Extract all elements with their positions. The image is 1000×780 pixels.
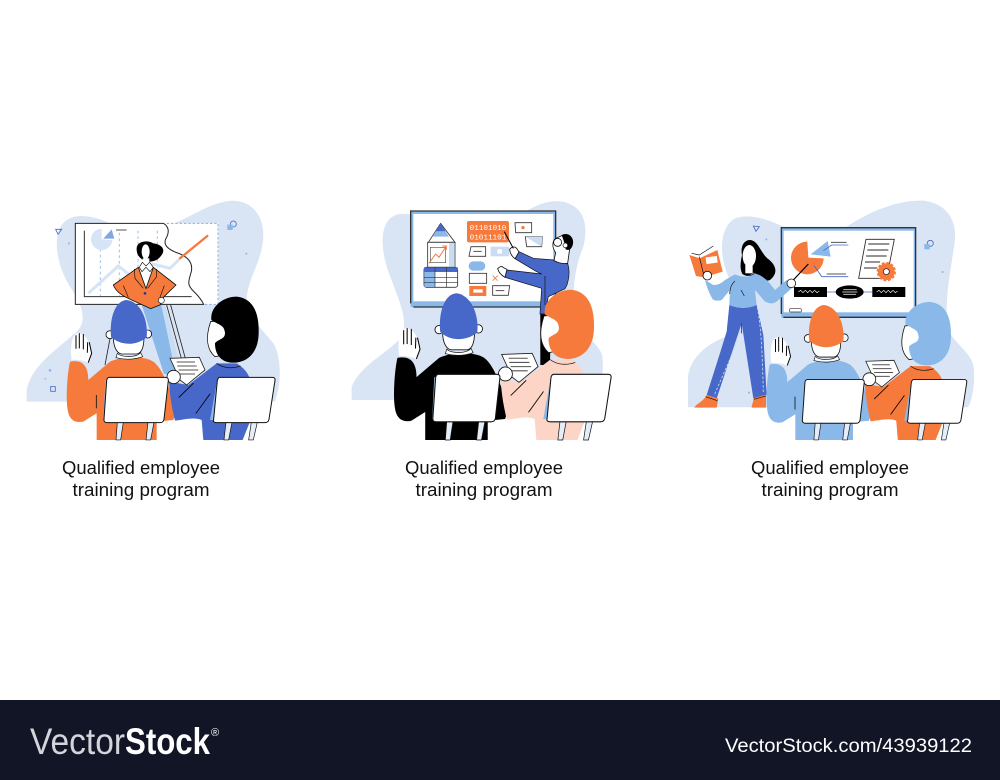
person left torso (67, 357, 177, 440)
whiteboard (781, 228, 916, 318)
footer band (0, 700, 1000, 780)
VectorStock logo: Stock (125, 721, 210, 762)
image id: VectorStock.com/43939122 (725, 736, 972, 757)
presenter with book and pointer (689, 240, 808, 408)
flowchart blocks (469, 223, 542, 296)
audience: two seated people (67, 297, 275, 440)
binary code tile: 01101010 (470, 225, 507, 233)
raised hand (71, 333, 92, 363)
background blob (27, 201, 280, 402)
person right torso (169, 363, 251, 440)
whiteboard (411, 211, 556, 307)
panel: scene three, presenter with book (688, 201, 974, 440)
book (689, 246, 723, 280)
chair left (103, 377, 168, 440)
whiteboard with chart (75, 223, 218, 304)
chair right (543, 374, 611, 440)
decorative shapes (748, 226, 944, 394)
pie chart (791, 241, 848, 277)
right person head and hair (902, 302, 951, 365)
background blob (352, 201, 603, 400)
pencil tower chart (424, 223, 458, 287)
binary code tile (467, 221, 509, 242)
person right torso (865, 366, 943, 440)
heading: caption three: Qualified employee (751, 458, 909, 478)
chair left (802, 380, 864, 440)
raised hand (399, 328, 420, 359)
audience: two seated people (394, 290, 611, 440)
sweater (705, 273, 793, 308)
chair right (904, 380, 967, 440)
chair right (210, 377, 275, 440)
raised hand (771, 337, 791, 365)
heading: caption three: training program (762, 480, 898, 500)
chair left (432, 374, 500, 440)
VectorStock logo: Vector (30, 721, 125, 762)
pointer and hand (787, 264, 808, 288)
background blob (688, 201, 974, 407)
heading: caption two: training program (416, 480, 552, 500)
presenter in orange jacket (113, 241, 185, 374)
panel: scene two, presenter with data board (352, 201, 611, 440)
head and hat left (435, 293, 483, 355)
document (498, 353, 538, 382)
right person head and hair (541, 290, 594, 359)
process flow (794, 285, 905, 299)
heading: caption two (405, 458, 563, 500)
document with gear (859, 239, 895, 280)
right person collar (550, 360, 575, 364)
person right torso (501, 360, 586, 440)
head and hat left (804, 305, 848, 362)
document (167, 357, 205, 385)
right person head and hair (208, 297, 259, 363)
head and hat left (105, 300, 152, 365)
heading: caption one: Qualified employee (62, 458, 220, 478)
heading: caption three (751, 458, 909, 500)
binary code tile: 01011101 (470, 234, 507, 242)
heading: caption one (62, 458, 220, 500)
right person collar (217, 363, 241, 368)
decorative shapes (44, 221, 247, 391)
presenter pointing at board (498, 232, 573, 365)
audience: two seated people (767, 302, 967, 440)
document (863, 360, 899, 387)
heading: caption two: Qualified employee (405, 458, 563, 478)
pants (707, 305, 767, 398)
right person collar (911, 366, 934, 370)
panel: scene one, presenter with chart (27, 201, 280, 440)
VectorStock logo: ® (211, 727, 219, 739)
heading: caption one: training program (72, 480, 210, 500)
VectorStock logo (30, 721, 219, 762)
